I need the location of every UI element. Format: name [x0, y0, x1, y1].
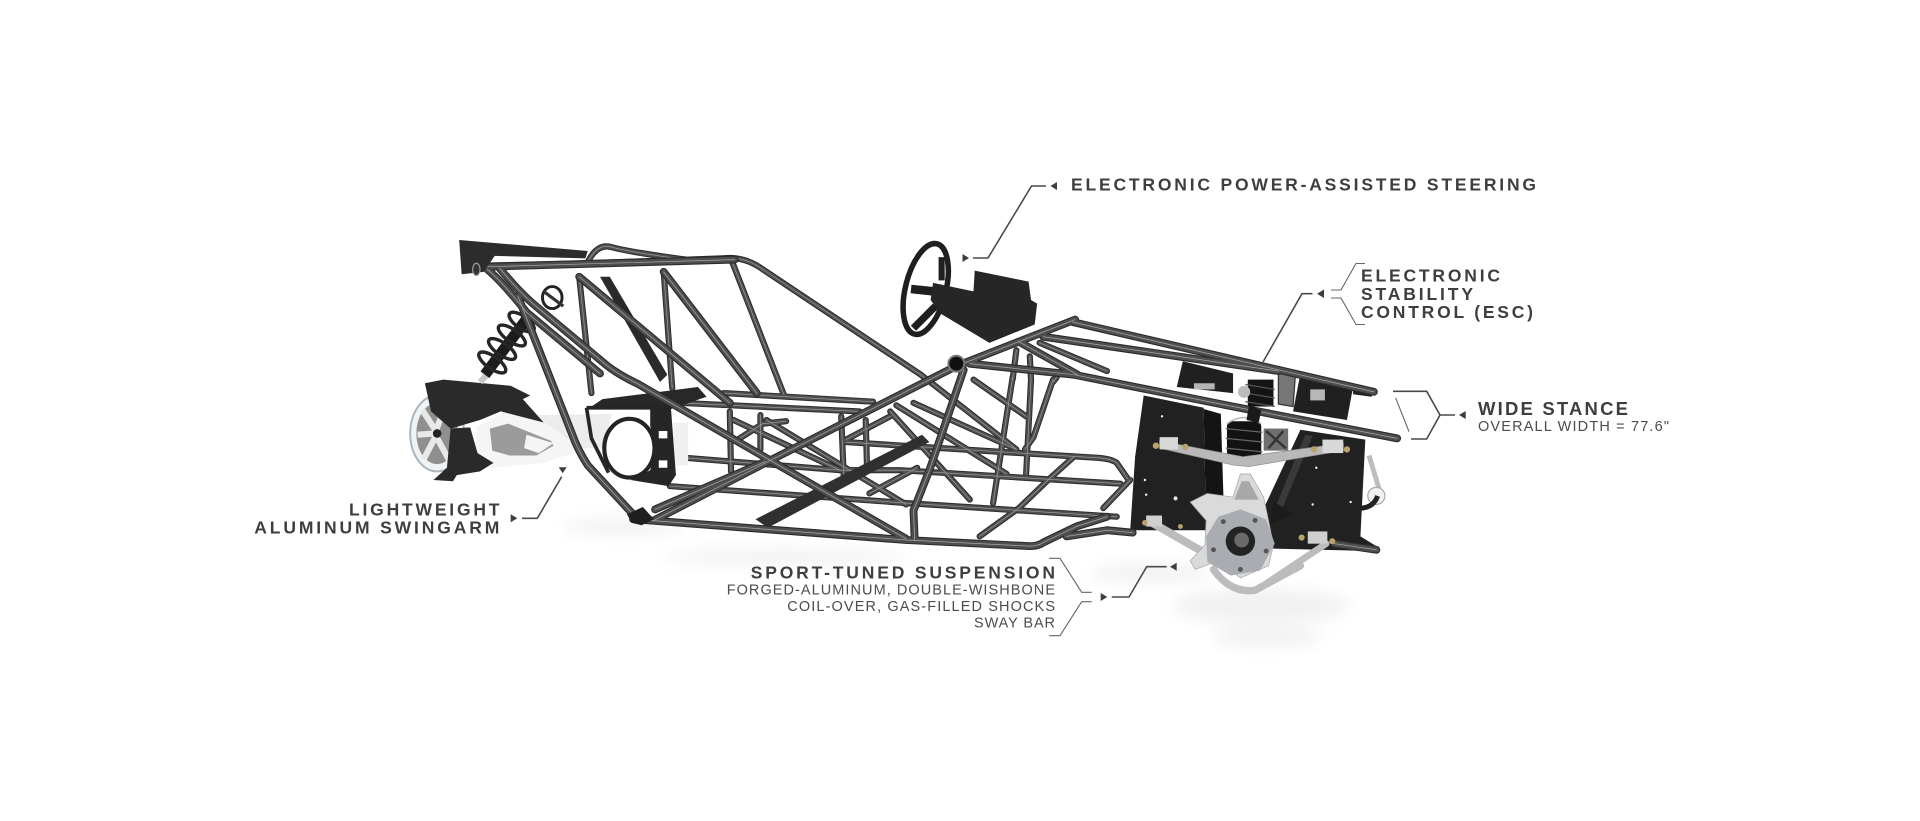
- chassis illustration: [410, 239, 1397, 647]
- frame nodes: [473, 263, 1261, 525]
- bracket: [1049, 558, 1092, 636]
- rear tube frame: [480, 246, 1130, 536]
- label: electronic stability control: [1263, 264, 1533, 362]
- heading: LIGHTWEIGHT: [349, 500, 500, 520]
- panel rivets: [1144, 415, 1352, 506]
- heading: ALUMINUM SWINGARM: [254, 517, 499, 537]
- heading: WIDE STANCE: [1478, 398, 1628, 419]
- width line: [1396, 398, 1409, 432]
- steering wheel: [895, 239, 957, 339]
- rear spring and damper: [1194, 371, 1325, 407]
- swingarm guard: [425, 380, 544, 481]
- leader line: [973, 186, 1046, 258]
- subtext: COIL-OVER, GAS-FILLED SHOCKS: [787, 599, 1055, 615]
- arrow: [559, 467, 567, 473]
- lower control arms: [1142, 516, 1335, 591]
- bracket: [1331, 264, 1365, 324]
- subtext: FORGED-ALUMINUM, DOUBLE-WISHBONE: [727, 582, 1055, 598]
- subtext: OVERALL WIDTH = 77.6": [1478, 419, 1669, 435]
- rear top plate: [459, 240, 588, 274]
- front coil spring: [1226, 418, 1288, 460]
- label: sport-tuned suspension: [727, 558, 1177, 636]
- rear suspension panels: [1177, 361, 1374, 420]
- steering column: [931, 271, 1037, 343]
- leader line: [522, 477, 562, 518]
- heading: ELECTRONIC: [1361, 266, 1500, 286]
- leader line: [1263, 294, 1312, 362]
- leader line: [1112, 567, 1167, 597]
- bracket: [1393, 391, 1455, 439]
- heading: ELECTRONIC POWER-ASSISTED STEERING: [1071, 174, 1536, 194]
- label: wide stance: [1393, 391, 1669, 439]
- heading: CONTROL (ESC): [1361, 302, 1533, 322]
- subtext: SWAY BAR: [974, 616, 1055, 632]
- arrow: [962, 254, 969, 262]
- arrow: [1170, 563, 1177, 571]
- wheel knuckle and hub: [1190, 474, 1275, 578]
- arrow: [511, 514, 517, 522]
- rear wheel: [410, 396, 464, 471]
- heading: STABILITY: [1361, 284, 1473, 304]
- arrow: [1101, 593, 1107, 601]
- label: electronic power-assisted steering: [962, 174, 1536, 262]
- aluminum swingarm: [476, 411, 612, 468]
- front tube frame: [480, 260, 1397, 550]
- label: lightweight aluminum swingarm: [254, 467, 567, 537]
- floor channel: [756, 435, 929, 528]
- arrow: [1050, 182, 1057, 190]
- heading: SPORT-TUNED SUSPENSION: [751, 562, 1055, 582]
- rear shock: [476, 287, 563, 382]
- upper control arm: [1153, 437, 1350, 467]
- arrow: [1459, 411, 1466, 419]
- ground shadow: [563, 519, 1349, 647]
- arrow: [1317, 290, 1324, 298]
- black strut: [600, 277, 667, 382]
- front suspension panels: [1130, 396, 1376, 551]
- sway bar: [1271, 456, 1385, 523]
- engine mount bracket: [587, 387, 707, 486]
